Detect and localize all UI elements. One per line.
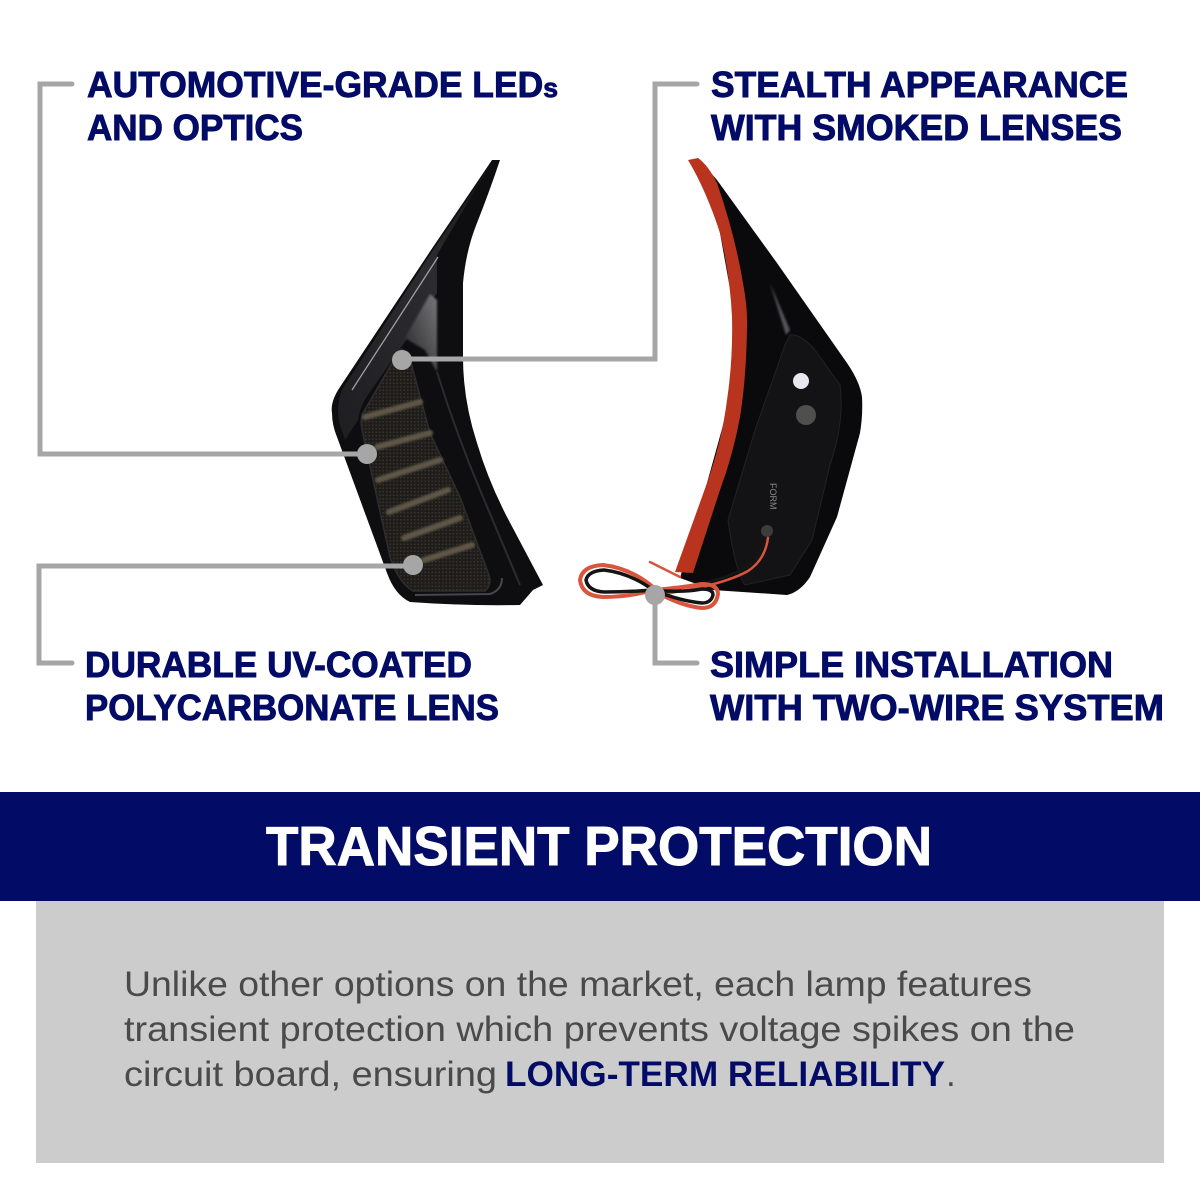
heading: polycarbonate lens: POLYCARBONATE LENS (85, 687, 499, 728)
grey vent (796, 405, 816, 425)
heading: automotive-grade LEDs: AND OPTICS (87, 107, 303, 148)
connector (761, 525, 773, 537)
lens (361, 349, 490, 591)
lamp: rear view with adhesive strip and wires (580, 158, 862, 608)
heading: stealth appearance (711, 64, 1128, 148)
banner: transient protection: TRANSIENT PROTECTION (266, 815, 932, 877)
side contour (437, 372, 520, 585)
banner: transient protection (0, 792, 1200, 901)
circuit board cover (728, 335, 841, 585)
heading: polycarbonate lens (85, 644, 499, 728)
connector: stealth appearance (392, 84, 697, 370)
body text: circuit board, ensuring (124, 1055, 497, 1094)
highlight line (352, 257, 438, 390)
body text: transient protection which prevents voltage spikes on the (124, 1010, 1075, 1049)
lamp housing (332, 160, 543, 605)
connector: polycarbonate lens (39, 555, 423, 663)
body text: Unlike other options on the market, each lamp features (124, 965, 1032, 1004)
lamp: front view with smoked lens (332, 160, 543, 605)
connector: two-wire system (645, 585, 697, 663)
heading: simple installation: SIMPLE INSTALLATION (710, 644, 1113, 685)
panel: text background (36, 901, 1164, 1163)
lens LED bars (365, 402, 472, 560)
heading: simple installation (710, 644, 1164, 728)
moulded text: FORM (768, 483, 778, 510)
heading: stealth appearance: WITH SMOKED LENSES (711, 107, 1122, 148)
white label (793, 373, 809, 389)
lower lens rim highlight (415, 578, 502, 595)
inner reflection (405, 294, 437, 372)
wires (580, 538, 768, 608)
body text: LONG-TERM RELIABILITY (505, 1055, 945, 1094)
heading: stealth appearance: STEALTH APPEARANCE (711, 64, 1128, 105)
rear housing (680, 158, 862, 595)
heading: polycarbonate lens: DURABLE UV-COATED (85, 644, 472, 685)
heading: automotive-grade LEDs: AUTOMOTIVE-GRADE LEDs (87, 64, 558, 105)
body text (124, 965, 1075, 1094)
heading: simple installation: WITH TWO-WIRE SYSTEM (710, 687, 1164, 728)
rear highlight (770, 283, 790, 335)
heading: automotive-grade LEDs (87, 64, 558, 148)
body text: . (946, 1055, 956, 1094)
housing ridge (338, 163, 492, 440)
connector: LEDs and optics (40, 84, 377, 464)
red adhesive strip (675, 158, 747, 573)
